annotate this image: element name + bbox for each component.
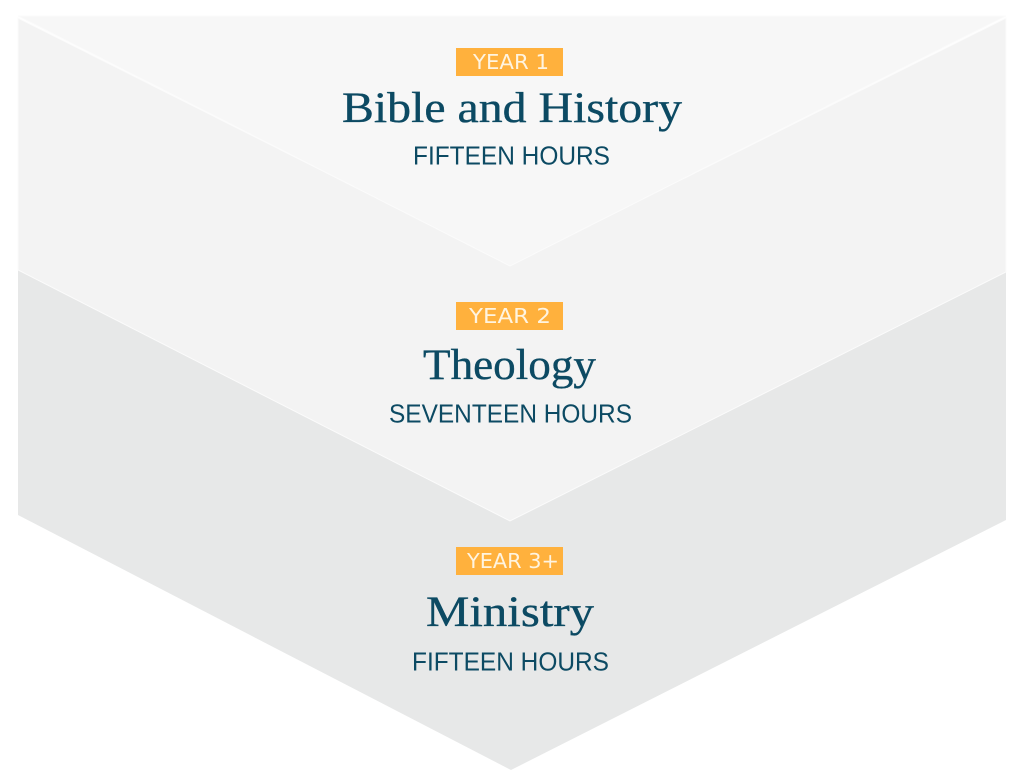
panel: year 3 chevron [18,270,1006,770]
heading: Theology: Theology [423,342,597,389]
year 3 content [412,547,609,676]
hours: seventeen hours: SEVENTEEN HOURS [389,398,632,428]
heading: Bible and History: Bible and History [342,85,683,132]
badge: year 2 [456,302,563,330]
badge: year 2: YEAR 2 [468,304,551,328]
badge: year 1: YEAR 1 [472,50,549,74]
panel: year 1 chevron [18,16,1006,266]
year 2 content [389,302,632,428]
hours: fifteen hours: FIFTEEN HOURS [413,140,610,170]
heading: Ministry: Ministry [426,589,595,636]
badge: year 3+: YEAR 3+ [466,549,559,573]
badge: year 1 [456,48,563,76]
year 1 content [342,48,683,170]
hours: fifteen hours: FIFTEEN HOURS [412,646,609,676]
panel: year 2 chevron [18,18,1006,521]
